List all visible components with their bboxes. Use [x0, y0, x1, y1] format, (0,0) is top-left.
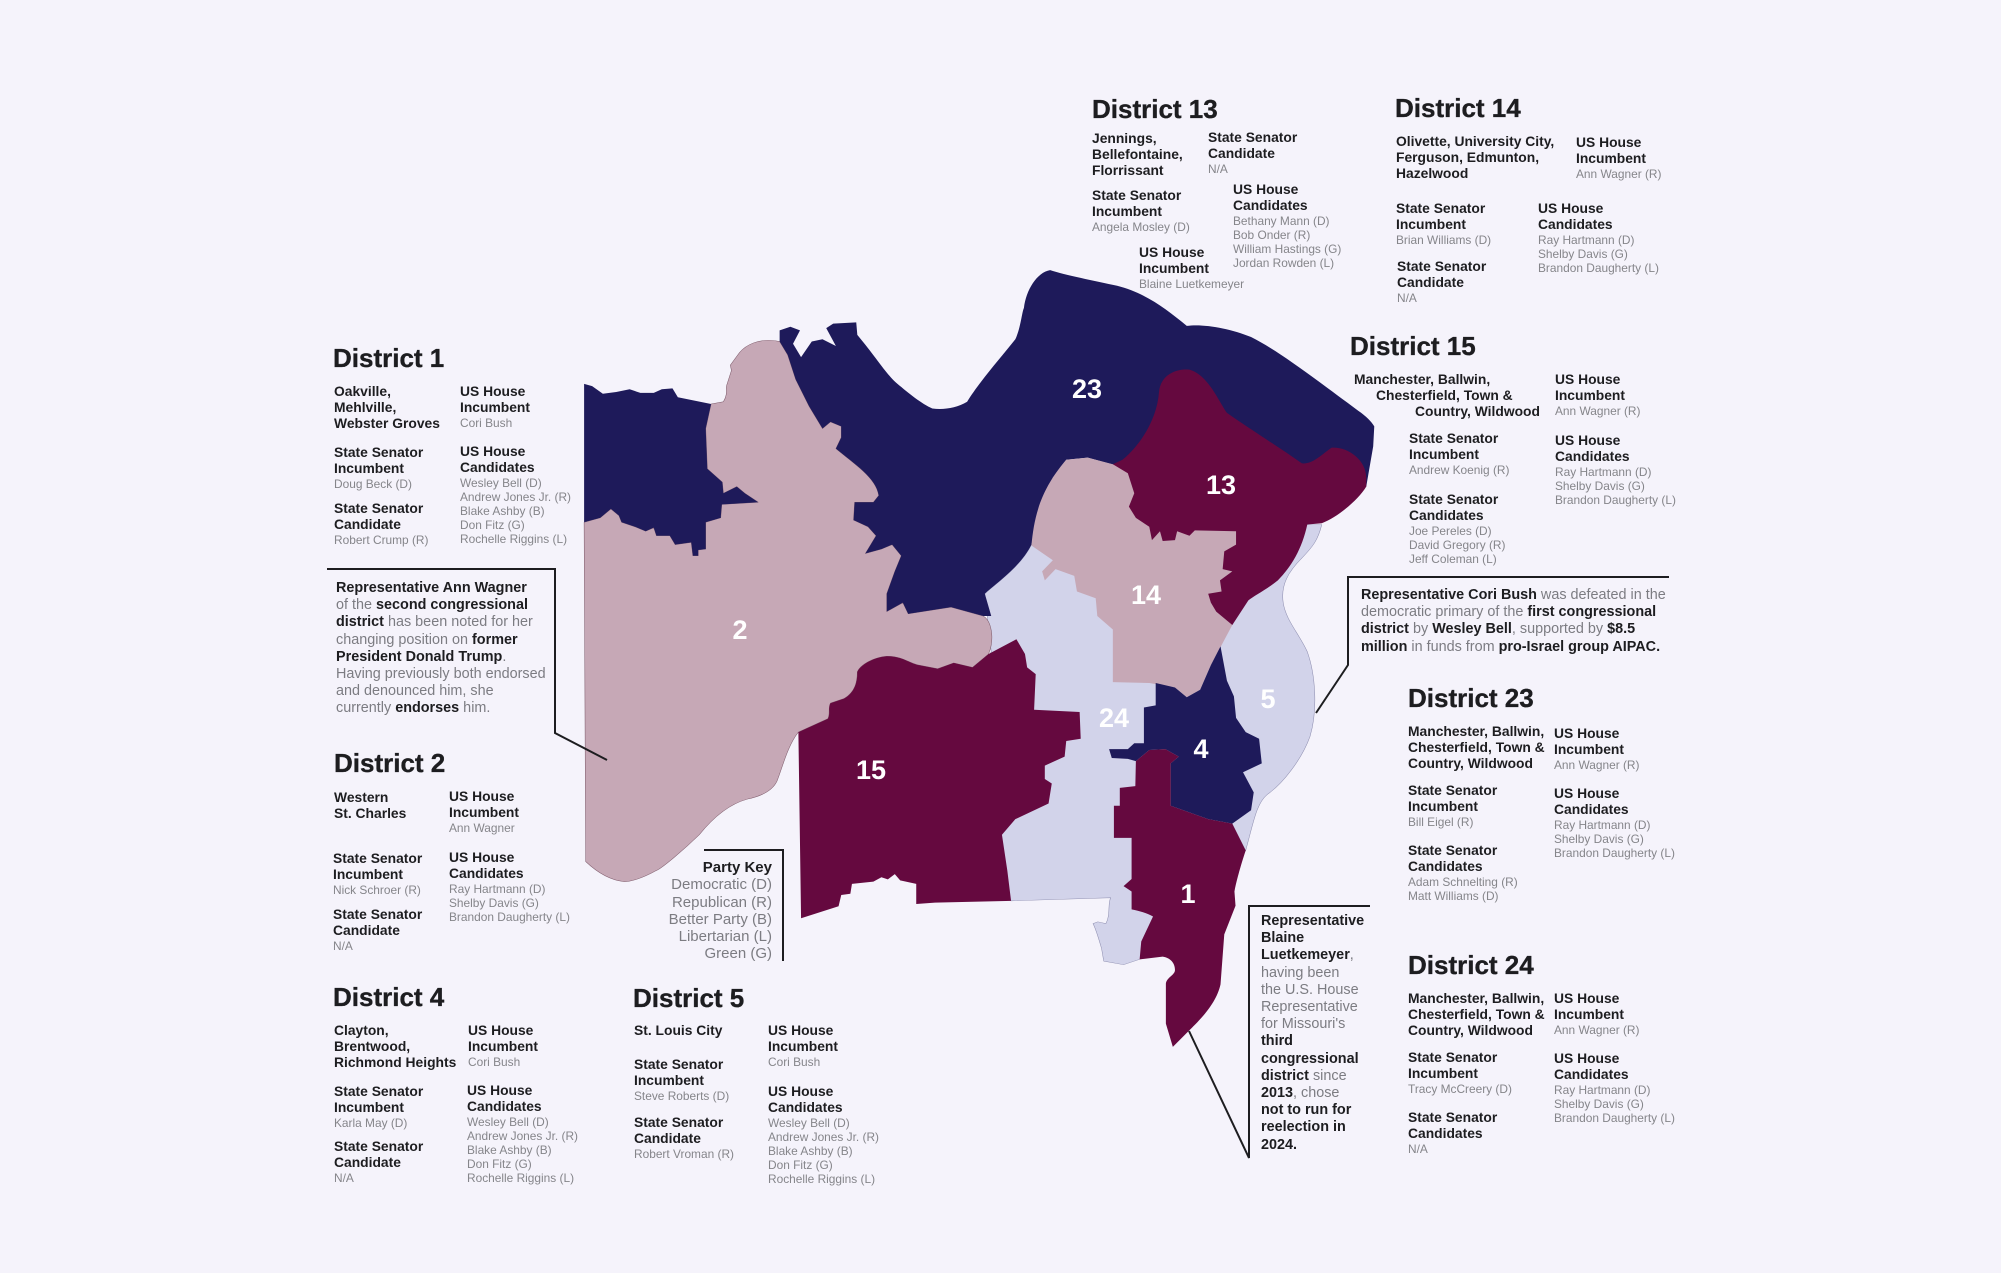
places: [334, 789, 406, 821]
State Senator candidate: [634, 1114, 734, 1161]
panel: party key: Libertarian (L): [679, 928, 772, 945]
State Senator candidate: N/A: [1397, 291, 1417, 305]
State Senator candidate: State Senator: [1208, 129, 1297, 145]
callout: Blaine Luetkemeyer: Luetkemeyer,: [1261, 947, 1354, 963]
US House candidates: Shelby Davis (G): [1554, 832, 1644, 846]
US House incumbent: Incumbent: [460, 399, 530, 415]
US House incumbent: [460, 383, 530, 430]
State Senator incumbent: State Senator: [334, 444, 423, 460]
US House incumbent: US House: [449, 788, 514, 804]
panel: District 4: [333, 982, 578, 1185]
US House candidates: US House: [1555, 432, 1620, 448]
US House incumbent: [768, 1022, 838, 1069]
heading: District 5: [633, 983, 744, 1013]
panel: District 15: [1350, 331, 1676, 566]
US House candidates: Shelby Davis (G): [1538, 247, 1628, 261]
State Senator incumbent: Incumbent: [334, 460, 404, 476]
State Senator candidate: N/A: [333, 939, 353, 953]
places: Jennings,: [1092, 130, 1157, 146]
US House incumbent: Ann Wagner (R): [1555, 404, 1640, 418]
US House candidates: Rochelle Riggins (L): [467, 1171, 574, 1185]
US House incumbent: [1555, 371, 1640, 418]
callout: Ann Wagner: Representative Ann Wagner: [336, 580, 527, 596]
callout: Ann Wagner: Having previously both endorsed: [336, 666, 546, 682]
State Senator incumbent: [334, 444, 424, 491]
US House incumbent: Incumbent: [768, 1038, 838, 1054]
places: Richmond Heights: [334, 1054, 456, 1070]
panel: party key: Democratic (D): [671, 876, 772, 893]
places: Webster Groves: [334, 415, 440, 431]
State Senator candidates: Candidates: [1409, 507, 1484, 523]
State Senator candidate: Robert Vroman (R): [634, 1147, 734, 1161]
US House incumbent: Ann Wagner (R): [1554, 1023, 1639, 1037]
US House incumbent: US House: [468, 1022, 533, 1038]
US House candidates: [1538, 200, 1659, 275]
callout: Cori Bush: million in funds from pro-Israel group AIPAC.: [1361, 639, 1660, 655]
State Senator incumbent: Nick Schroer (R): [333, 883, 421, 897]
US House incumbent: Incumbent: [1554, 741, 1624, 757]
district numbers: 4: [1193, 734, 1209, 764]
US House candidates: Wesley Bell (D): [467, 1115, 549, 1129]
State Senator candidate: [334, 1138, 424, 1185]
US House incumbent: [1139, 244, 1244, 291]
State Senator incumbent: State Senator: [1408, 1049, 1497, 1065]
State Senator incumbent: State Senator: [1092, 187, 1181, 203]
State Senator candidate: State Senator: [634, 1114, 723, 1130]
US House incumbent: Cori Bush: [460, 416, 512, 430]
State Senator candidate: [333, 906, 422, 953]
US House incumbent: [1576, 134, 1661, 181]
US House candidates: Andrew Jones Jr. (R): [460, 490, 571, 504]
district numbers: 14: [1131, 580, 1161, 610]
US House incumbent: [468, 1022, 538, 1069]
State Senator candidate: [1208, 129, 1298, 176]
district 4: [1109, 646, 1262, 824]
US House candidates: Blake Ashby (B): [768, 1144, 853, 1158]
State Senator incumbent: Incumbent: [1408, 1065, 1478, 1081]
places: Oakville,: [334, 383, 391, 399]
State Senator incumbent: Doug Beck (D): [334, 477, 412, 491]
US House candidates: Shelby Davis (G): [1554, 1097, 1644, 1111]
places: Chesterfield, Town &: [1408, 1006, 1545, 1022]
State Senator candidate: State Senator: [334, 500, 423, 516]
US House candidates: Brandon Daugherty (L): [1555, 493, 1676, 507]
panel: party key: Green (G): [704, 945, 772, 962]
heading: District 4: [333, 982, 444, 1012]
callout: Ann Wagner: changing position on former: [336, 632, 518, 648]
US House incumbent: US House: [1554, 725, 1619, 741]
State Senator incumbent: Steve Roberts (D): [634, 1089, 729, 1103]
callout: Ann Wagner: currently endorses him.: [336, 700, 490, 716]
State Senator incumbent: Incumbent: [1408, 798, 1478, 814]
State Senator candidates: Candidates: [1408, 1125, 1483, 1141]
State Senator candidate: Candidate: [1397, 274, 1464, 290]
US House candidates: Ray Hartmann (D): [1554, 818, 1650, 832]
places: Hazelwood: [1396, 165, 1468, 181]
US House incumbent: Ann Wagner: [449, 821, 515, 835]
State Senator candidates: Candidates: [1408, 858, 1483, 874]
places: [1092, 130, 1183, 178]
places: Chesterfield, Town &: [1408, 739, 1545, 755]
places: Manchester, Ballwin,: [1408, 990, 1544, 1006]
district numbers: 1: [1180, 879, 1196, 909]
US House incumbent: US House: [1555, 371, 1620, 387]
callout: Ann Wagner: of the second congressional: [336, 597, 528, 613]
US House candidates: [768, 1083, 879, 1186]
US House candidates: Rochelle Riggins (L): [768, 1172, 875, 1186]
places: [334, 383, 440, 431]
leader line: Cori Bush: [1316, 577, 1669, 713]
US House incumbent: Incumbent: [1139, 260, 1209, 276]
US House candidates: Shelby Davis (G): [449, 896, 539, 910]
State Senator candidates: [1408, 842, 1518, 903]
US House incumbent: Incumbent: [1554, 1006, 1624, 1022]
US House candidates: US House: [1538, 200, 1603, 216]
heading: District 2: [334, 748, 445, 778]
US House candidates: [1554, 785, 1675, 860]
district 14: [1031, 458, 1256, 697]
panel: District 23: [1405, 680, 1685, 905]
US House incumbent: [1554, 990, 1639, 1037]
US House candidates: Brandon Daugherty (L): [1554, 846, 1675, 860]
callout: Blaine Luetkemeyer: 2024.: [1261, 1137, 1297, 1153]
panel: party key: Party Key: [703, 859, 772, 876]
US House incumbent: US House: [1554, 990, 1619, 1006]
callout: Blaine Luetkemeyer: Blaine: [1261, 930, 1304, 946]
heading: District 1: [333, 343, 444, 373]
callout: Cori Bush: Representative Cori Bush was defeated in the: [1361, 587, 1666, 603]
places: Country, Wildwood: [1408, 1022, 1533, 1038]
State Senator incumbent: [634, 1056, 729, 1103]
places: [1396, 133, 1554, 181]
State Senator candidate: N/A: [334, 1171, 354, 1185]
US House candidates: Candidates: [1555, 448, 1630, 464]
district numbers: 13: [1206, 470, 1236, 500]
State Senator incumbent: State Senator: [333, 850, 422, 866]
State Senator candidates: State Senator: [1409, 491, 1498, 507]
US House incumbent: US House: [1139, 244, 1204, 260]
places: St. Louis City: [634, 1022, 722, 1038]
US House incumbent: Incumbent: [1576, 150, 1646, 166]
places: Bellefontaine,: [1092, 146, 1183, 162]
US House candidates: US House: [1554, 1050, 1619, 1066]
State Senator incumbent: State Senator: [334, 1083, 423, 1099]
district numbers: 5: [1260, 684, 1276, 714]
callout: Ann Wagner: President Donald Trump.: [336, 649, 506, 665]
places: Manchester, Ballwin,: [1408, 723, 1544, 739]
US House candidates: Blake Ashby (B): [467, 1143, 552, 1157]
State Senator candidate: Candidate: [634, 1130, 701, 1146]
US House candidates: Don Fitz (G): [768, 1158, 833, 1172]
panel: District 13: [1092, 94, 1341, 291]
State Senator incumbent: [1408, 1049, 1512, 1096]
panel: District 2: [333, 748, 570, 953]
US House candidates: Ray Hartmann (D): [1555, 465, 1651, 479]
heading: District 14: [1395, 93, 1521, 123]
State Senator candidate: State Senator: [333, 906, 422, 922]
district numbers: 2: [732, 615, 748, 645]
US House candidates: Candidates: [1554, 1066, 1629, 1082]
places: Florrissant: [1092, 162, 1164, 178]
district 15: [798, 639, 1081, 918]
callout: Blaine Luetkemeyer: district since: [1261, 1068, 1347, 1084]
US House candidates: US House: [467, 1082, 532, 1098]
callout: Blaine Luetkemeyer: having been: [1261, 965, 1339, 981]
US House candidates: Wesley Bell (D): [768, 1116, 850, 1130]
US House candidates: Candidates: [460, 459, 535, 475]
State Senator candidates: State Senator: [1408, 1109, 1497, 1125]
US House candidates: William Hastings (G): [1233, 242, 1341, 256]
places: [334, 1022, 456, 1070]
US House candidates: Don Fitz (G): [467, 1157, 532, 1171]
district 1: [1114, 749, 1246, 1047]
State Senator candidates: David Gregory (R): [1409, 538, 1505, 552]
US House candidates: Brandon Daugherty (L): [449, 910, 570, 924]
panel: party key: Republican (R): [672, 894, 772, 911]
callout: Blaine Luetkemeyer: not to run for: [1261, 1102, 1351, 1118]
State Senator incumbent: Incumbent: [634, 1072, 704, 1088]
US House candidates: Bob Onder (R): [1233, 228, 1310, 242]
US House candidates: [1554, 1050, 1675, 1125]
US House candidates: Jordan Rowden (L): [1233, 256, 1334, 270]
US House candidates: Don Fitz (G): [460, 518, 525, 532]
heading: District 23: [1408, 683, 1534, 713]
State Senator candidates: Jeff Coleman (L): [1409, 552, 1497, 566]
State Senator incumbent: Angela Mosley (D): [1092, 220, 1190, 234]
US House candidates: Candidates: [449, 865, 524, 881]
panel: District 14: [1395, 93, 1661, 305]
US House incumbent: [1554, 725, 1639, 772]
State Senator candidates: Joe Pereles (D): [1409, 524, 1492, 538]
US House candidates: Rochelle Riggins (L): [460, 532, 567, 546]
US House candidates: Candidates: [1233, 197, 1308, 213]
heading: District 13: [1092, 94, 1218, 124]
map of districts: [584, 270, 1374, 1047]
district 23 west section: [584, 384, 758, 556]
district numbers: [732, 374, 1276, 909]
State Senator candidates: [1408, 1109, 1497, 1156]
callout: Cori Bush: [1361, 587, 1671, 657]
State Senator candidate: [334, 500, 428, 547]
US House incumbent: Blaine Luetkemeyer: [1139, 277, 1244, 291]
US House candidates: Andrew Jones Jr. (R): [768, 1130, 879, 1144]
panel: party key: Better Party (B): [669, 911, 772, 928]
places: Clayton,: [334, 1022, 389, 1038]
callout: Blaine Luetkemeyer: [1261, 913, 1376, 1155]
callout: Blaine Luetkemeyer: third: [1261, 1033, 1293, 1049]
callout: Blaine Luetkemeyer: 2013, chose: [1261, 1085, 1339, 1101]
callout: Cori Bush: district by Wesley Bell, supported by $8.5: [1361, 621, 1635, 637]
places: St. Charles: [334, 805, 406, 821]
places: Ferguson, Edmunton,: [1396, 149, 1539, 165]
US House candidates: [1555, 432, 1676, 507]
State Senator candidate: N/A: [1208, 162, 1228, 176]
district 5 and 24: [935, 525, 1322, 965]
places: Western: [334, 789, 388, 805]
State Senator incumbent: Karla May (D): [334, 1116, 407, 1130]
US House candidates: Wesley Bell (D): [460, 476, 542, 490]
State Senator incumbent: [333, 850, 422, 897]
US House candidates: Candidates: [467, 1098, 542, 1114]
district 23 main section: [780, 270, 1374, 616]
panel: District 1: [333, 343, 571, 547]
US House candidates: Brandon Daugherty (L): [1538, 261, 1659, 275]
US House incumbent: Ann Wagner (R): [1576, 167, 1661, 181]
callout: Blaine Luetkemeyer: Representative: [1261, 999, 1358, 1015]
US House candidates: Ray Hartmann (D): [1554, 1083, 1650, 1097]
State Senator incumbent: State Senator: [1396, 200, 1485, 216]
callout: Ann Wagner: district has been noted for her: [336, 614, 533, 630]
US House candidates: [467, 1082, 578, 1185]
US House candidates: US House: [449, 849, 514, 865]
places: Chesterfield, Town &: [1376, 387, 1513, 403]
US House candidates: Ray Hartmann (D): [1538, 233, 1634, 247]
district 13: [1113, 369, 1366, 625]
callout: Blaine Luetkemeyer: congressional: [1261, 1051, 1359, 1067]
callout: Blaine Luetkemeyer: the U.S. House: [1261, 982, 1359, 998]
US House incumbent: Incumbent: [449, 804, 519, 820]
US House incumbent: US House: [1576, 134, 1641, 150]
US House incumbent: Incumbent: [1555, 387, 1625, 403]
district 2: [584, 340, 992, 882]
State Senator candidates: Matt Williams (D): [1408, 889, 1498, 903]
callout: Ann Wagner: [336, 580, 546, 716]
State Senator incumbent: State Senator: [1409, 430, 1498, 446]
places: [1408, 723, 1545, 771]
panel: District 5: [633, 983, 879, 1186]
district numbers: 24: [1099, 703, 1129, 733]
US House candidates: Shelby Davis (G): [1555, 479, 1645, 493]
US House incumbent: Ann Wagner (R): [1554, 758, 1639, 772]
US House incumbent: Cori Bush: [768, 1055, 820, 1069]
places: Manchester, Ballwin,: [1354, 371, 1490, 387]
State Senator candidate: Candidate: [1208, 145, 1275, 161]
heading: District 24: [1408, 950, 1534, 980]
callout: Blaine Luetkemeyer: for Missouri's: [1261, 1016, 1345, 1032]
places: [1354, 371, 1540, 419]
US House candidates: US House: [768, 1083, 833, 1099]
State Senator incumbent: Bill Eigel (R): [1408, 815, 1473, 829]
US House incumbent: [449, 788, 519, 835]
panel: District 24: [1405, 947, 1685, 1162]
State Senator incumbent: Incumbent: [334, 1099, 404, 1115]
US House candidates: US House: [1233, 181, 1298, 197]
State Senator candidate: State Senator: [334, 1138, 423, 1154]
places: Mehlville,: [334, 399, 396, 415]
places: Olivette, University City,: [1396, 133, 1554, 149]
US House candidates: Bethany Mann (D): [1233, 214, 1330, 228]
district numbers: 15: [856, 755, 886, 785]
State Senator candidates: N/A: [1408, 1142, 1428, 1156]
US House incumbent: Cori Bush: [468, 1055, 520, 1069]
US House candidates: [460, 443, 571, 546]
US House incumbent: Incumbent: [468, 1038, 538, 1054]
places: Country, Wildwood: [1408, 755, 1533, 771]
callout: Cori Bush: democratic primary of the first congressional: [1361, 604, 1656, 620]
panel: party key: [669, 859, 772, 962]
State Senator incumbent: State Senator: [634, 1056, 723, 1072]
State Senator candidates: [1409, 491, 1505, 566]
callout: Ann Wagner: and denounced him, she: [336, 683, 494, 699]
State Senator candidate: Candidate: [334, 1154, 401, 1170]
US House candidates: [1233, 181, 1341, 270]
State Senator incumbent: Tracy McCreery (D): [1408, 1082, 1512, 1096]
places: [1408, 990, 1545, 1038]
callout: Blaine Luetkemeyer: reelection in: [1261, 1119, 1346, 1135]
State Senator incumbent: [1092, 187, 1190, 234]
State Senator candidate: Candidate: [334, 516, 401, 532]
heading: District 15: [1350, 331, 1476, 361]
State Senator candidates: State Senator: [1408, 842, 1497, 858]
State Senator candidate: State Senator: [1397, 258, 1486, 274]
US House candidates: Andrew Jones Jr. (R): [467, 1129, 578, 1143]
US House candidates: US House: [1554, 785, 1619, 801]
State Senator incumbent: Incumbent: [1092, 203, 1162, 219]
callout: Blaine Luetkemeyer: Representative: [1261, 913, 1364, 929]
US House incumbent: US House: [460, 383, 525, 399]
State Senator incumbent: Incumbent: [1409, 446, 1479, 462]
party key bracket: [704, 850, 783, 961]
State Senator incumbent: [334, 1083, 424, 1130]
State Senator candidate: Robert Crump (R): [334, 533, 428, 547]
State Senator incumbent: Andrew Koenig (R): [1409, 463, 1509, 477]
US House candidates: Candidates: [1554, 801, 1629, 817]
US House candidates: Blake Ashby (B): [460, 504, 545, 518]
State Senator incumbent: Brian Williams (D): [1396, 233, 1491, 247]
US House candidates: Ray Hartmann (D): [449, 882, 545, 896]
State Senator incumbent: [1396, 200, 1491, 247]
US House incumbent: US House: [768, 1022, 833, 1038]
places: Brentwood,: [334, 1038, 410, 1054]
US House candidates: [449, 849, 570, 924]
places: Country, Wildwood: [1415, 403, 1540, 419]
US House candidates: Candidates: [1538, 216, 1613, 232]
State Senator candidates: Adam Schnelting (R): [1408, 875, 1518, 889]
leader line: Ann Wagner: [327, 569, 607, 760]
State Senator candidate: Candidate: [333, 922, 400, 938]
US House candidates: US House: [460, 443, 525, 459]
State Senator incumbent: Incumbent: [1396, 216, 1466, 232]
State Senator incumbent: [1409, 430, 1509, 477]
State Senator incumbent: State Senator: [1408, 782, 1497, 798]
State Senator incumbent: [1408, 782, 1497, 829]
US House candidates: Brandon Daugherty (L): [1554, 1111, 1675, 1125]
State Senator candidate: [1397, 258, 1486, 305]
district numbers: 23: [1072, 374, 1102, 404]
State Senator incumbent: Incumbent: [333, 866, 403, 882]
US House candidates: Candidates: [768, 1099, 843, 1115]
leader line: Blaine Luetkemeyer: [1189, 906, 1370, 1158]
